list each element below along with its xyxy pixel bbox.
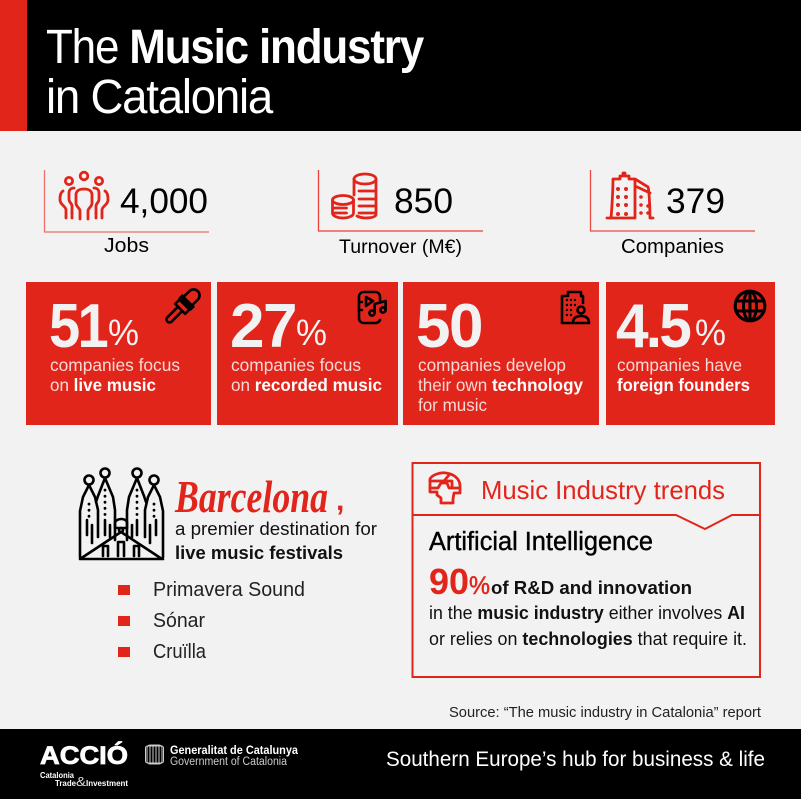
title: The Music industry (46, 21, 424, 74)
description: companies develop (418, 355, 566, 375)
statistic text: 90 (429, 561, 469, 602)
label: Jobs (104, 235, 149, 257)
panel: technology: for music (418, 395, 487, 415)
icon: globe (735, 291, 765, 321)
text: destination: live music festivals (175, 542, 343, 563)
value: 850 (394, 181, 453, 221)
header banner (0, 0, 801, 131)
festival list (118, 579, 305, 663)
icon: music file (359, 292, 386, 323)
statistic text: of R&D and innovation (491, 577, 692, 598)
figure 4.5%: 4.5 (616, 292, 690, 361)
panel: foreign founders (606, 282, 775, 425)
panel: technology (403, 282, 599, 425)
festival list: Sónar (153, 610, 205, 632)
label: Companies (621, 236, 724, 258)
subheading: Artificial Intelligence (429, 528, 653, 556)
panel: foreign founders: foreign founders (617, 375, 750, 395)
title: in Catalonia (46, 71, 274, 124)
text: destination: a premier destination for (175, 518, 377, 539)
panel: Music Industry trends (412, 463, 760, 677)
description: companies focus (231, 355, 361, 375)
icon: building with person (562, 292, 589, 323)
stat: jobs (44, 170, 209, 257)
panel: live music (26, 282, 211, 425)
label: Turnover (M€) (339, 236, 462, 258)
stat: companies (590, 170, 755, 258)
logo: Generalitat: Government of Catalonia (170, 756, 288, 768)
logo: ACCIÓ: & (76, 774, 86, 789)
icon: coins (332, 174, 376, 218)
festival list: Primavera Sound (153, 579, 305, 601)
logo: ACCIÓ: Catalonia (40, 771, 75, 780)
title (46, 21, 424, 124)
statistic text (429, 561, 747, 649)
panel: technology: their own technology (418, 375, 583, 395)
icon: microphone (161, 285, 204, 328)
icon: people (60, 172, 108, 219)
festival list: Cruïlla (153, 641, 207, 663)
stat: turnover (318, 170, 483, 258)
panel: live music: on live music (50, 375, 156, 395)
logo: ACCIÓ: Trade (55, 779, 77, 788)
logo: Generalitat: Generalitat de Catalunya (170, 745, 299, 757)
panel: recorded music: on recorded music (231, 375, 382, 395)
statistic text: % (469, 572, 490, 600)
panel: live music: % (108, 312, 139, 353)
heading: Barcelona: , (336, 484, 344, 517)
figure 51%: 51 (49, 292, 107, 361)
statistic text: in the music industry either involves AI (429, 603, 745, 623)
description: companies have (617, 355, 742, 375)
panel: recorded music (217, 282, 398, 425)
icon: head with VR headset (430, 473, 460, 503)
logo: ACCIÓ (40, 740, 128, 789)
text: destination (175, 518, 377, 563)
icon: Sagrada Familia (80, 468, 163, 559)
logo: ACCIÓ: Investment (86, 779, 128, 788)
panel: foreign founders: % (695, 312, 726, 353)
tagline: Southern Europe’s hub for business & life (386, 748, 765, 771)
icon: buildings (607, 173, 653, 218)
logo: ACCIÓ: ACCIÓ (40, 740, 128, 770)
source: Source: “The music industry in Catalonia” report (449, 705, 761, 721)
value: 379 (666, 181, 725, 221)
figure 27%: 27 (230, 292, 296, 361)
figure 50: 50 (416, 292, 482, 361)
panel heading: Music Industry trends (481, 475, 725, 505)
panel: recorded music: % (296, 312, 327, 353)
value: 4,000 (120, 181, 208, 221)
footer bar (0, 729, 801, 799)
heading: Barcelona: Barcelona (174, 471, 328, 522)
logo: Generalitat (146, 745, 299, 768)
statistic text: or relies on technologies that require it. (429, 629, 747, 649)
description: companies focus (50, 355, 180, 375)
